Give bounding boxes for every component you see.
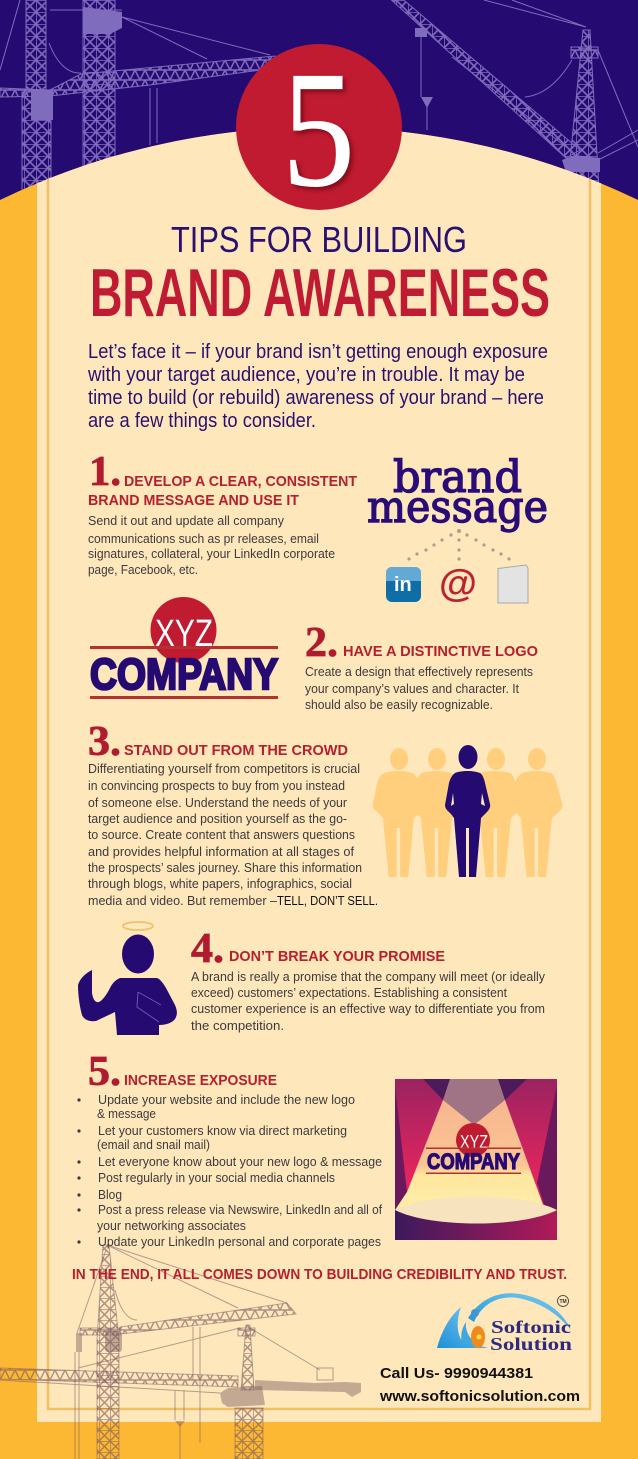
tip 3 text — [88, 719, 378, 908]
cream dome panel — [37, 127, 601, 1422]
mini XYZ logo: XYZ — [460, 1132, 488, 1152]
bullet list — [77, 1092, 382, 1249]
tip 3 text: and provides helpful information at all stages of — [88, 844, 354, 859]
brand message graphic — [367, 452, 548, 605]
background: navy sky — [0, 0, 638, 240]
inner border frame — [48, 179, 590, 1409]
tip 3 text: STAND OUT FROM THE CROWD — [124, 742, 348, 759]
tip 2 text: 2. — [305, 620, 338, 666]
bullet list: Post regularly in your social media channels — [98, 1170, 335, 1185]
intro paragraph: Let’s face it – if your brand isn’t getting enough exposure — [88, 341, 548, 363]
tip 3 text: Differentiating yourself from competitors is crucial — [88, 761, 360, 776]
contact details: Call Us- 9990944381 — [380, 1365, 533, 1382]
tip 5 text: 5. — [88, 1049, 121, 1095]
mini XYZ logo — [426, 1123, 521, 1174]
bullet list: your networking associates — [97, 1218, 246, 1233]
tip 3 text: to source. Create content that answers questions — [88, 827, 355, 842]
tip 3 text: target audience and position yourself as the go- — [88, 811, 347, 826]
bottom cranes — [0, 1245, 361, 1459]
closing statement: IN THE END, IT ALL COMES DOWN TO BUILDING CREDIBILITY AND TRUST. — [72, 1266, 567, 1283]
contact details — [379, 1365, 580, 1405]
tip 3 text: of someone else. Understand the needs of your — [88, 795, 348, 810]
bullet list: & message — [97, 1106, 156, 1121]
tip 3 text: in convincing prospects to buy from you instead — [88, 778, 345, 793]
bullet list: Let everyone know about your new logo & message — [98, 1154, 382, 1169]
tip 3 text: the prospects’ sales journey. Share this information — [88, 860, 362, 875]
title: TIPS FOR BUILDING — [171, 219, 467, 260]
intro paragraph: with your target audience, you’re in trouble. It may be — [87, 364, 525, 386]
softonic solution logo: TM — [560, 1299, 567, 1305]
XYZ company logo: XYZ — [155, 613, 213, 655]
icon: folded brochure — [498, 565, 528, 603]
tip 1 text — [88, 449, 357, 577]
XYZ company logo — [90, 597, 278, 699]
icon: at sign: @ — [439, 563, 477, 605]
icon: linkedin: in — [394, 574, 412, 596]
bullet list: Let your customers know via direct marketing — [98, 1123, 347, 1138]
softonic solution logo: Solution — [490, 1334, 572, 1354]
softonic solution logo — [437, 1293, 572, 1354]
tip 2 text — [305, 620, 538, 712]
tip 1 text: signatures, collateral, your LinkedIn corporate — [88, 546, 335, 561]
tip 4 text: 4. — [191, 926, 224, 972]
brand message graphic: brand — [393, 452, 522, 503]
brand message graphic: message — [367, 482, 548, 533]
bullet list: Post a press release via Newswire, LinkedIn and all of — [98, 1202, 382, 1217]
title — [90, 219, 550, 331]
tip 1 text: 1. — [89, 449, 121, 495]
tip 3 text: media and video. But remember – — [88, 893, 278, 908]
spotlight stage picture — [395, 1079, 557, 1240]
bullet list: Blog — [98, 1187, 122, 1202]
top cranes — [0, 0, 638, 202]
dotted connectors — [407, 529, 511, 561]
tip 5 text — [77, 1049, 382, 1249]
tip 1 text: page, Facebook, etc. — [88, 562, 198, 577]
softonic solution logo: Softonic — [491, 1317, 571, 1337]
tip 1 text: BRAND MESSAGE AND USE IT — [88, 492, 299, 509]
tip 2 text: should also be easily recognizable. — [305, 697, 493, 712]
number 5 badge: 5 — [282, 37, 355, 221]
tip 2 text: your company’s values and character. It — [305, 681, 519, 696]
tip 4 text: DON’T BREAK YOUR PROMISE — [229, 948, 445, 965]
bullet list: Update your LinkedIn personal and corporate pages — [98, 1234, 381, 1249]
tip 1 text: Send it out and update all company — [88, 513, 284, 528]
intro paragraph — [87, 341, 548, 432]
bullet list: Update your website and include the new logo — [98, 1092, 355, 1107]
tip 4 text: the competition. — [191, 1018, 284, 1033]
tip 3 text: 3. — [88, 719, 121, 765]
tip 1 text: communications such as pr releases, email — [88, 531, 319, 546]
tip 2 text: Create a design that effectively represents — [305, 664, 533, 679]
number 5 badge — [236, 37, 402, 221]
intro paragraph: time to build (or rebuild) awareness of your brand – here — [88, 387, 544, 409]
tip 3 text: TELL, DON’T SELL. — [277, 893, 378, 908]
mini XYZ logo: COMPANY — [427, 1149, 520, 1174]
intro paragraph: are a few things to consider. — [88, 410, 316, 432]
tip 3 text: through blogs, white papers, infographics, social — [88, 876, 352, 891]
tip 4 text: A brand is really a promise that the company will meet (or ideally — [191, 969, 545, 984]
tip 4 text: customer experience is an effective way to differentiate you from — [191, 1001, 545, 1016]
XYZ company logo: COMPANY — [90, 650, 278, 699]
people group icon — [373, 745, 563, 877]
tip 4 text: exceed) customers’ expectations. Establishing a consistent — [191, 985, 507, 1000]
tip 5 text: INCREASE EXPOSURE — [124, 1072, 277, 1089]
tip 4 text — [191, 926, 545, 1033]
bullet list: (email and snail mail) — [97, 1137, 210, 1152]
tip 2 text: HAVE A DISTINCTIVE LOGO — [343, 643, 538, 660]
contact details: www.softonicsolution.com — [379, 1388, 580, 1405]
icon: person with halo — [78, 922, 177, 1035]
icon: linkedin — [386, 567, 421, 602]
standout person — [445, 745, 490, 877]
tip 1 text: DEVELOP A CLEAR, CONSISTENT — [124, 473, 357, 490]
